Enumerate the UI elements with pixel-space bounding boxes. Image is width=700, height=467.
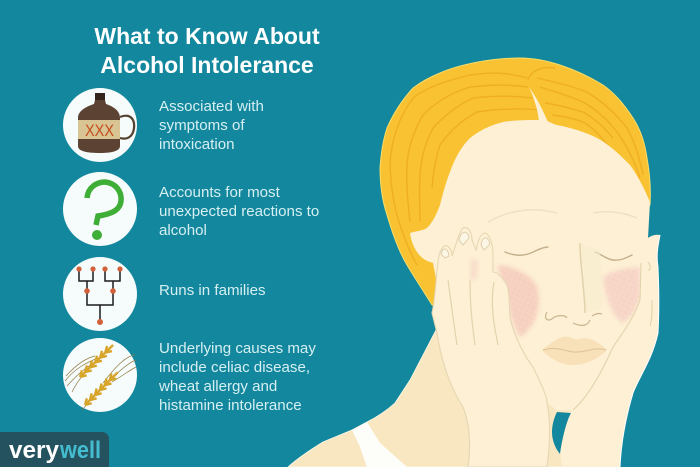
finger lines xyxy=(448,280,498,345)
pink finger blush xyxy=(470,257,478,280)
face xyxy=(410,120,650,410)
text: underlying causes: histamine intolerance xyxy=(159,397,302,414)
logo: verywell: very xyxy=(9,437,60,464)
fingernails xyxy=(441,232,490,258)
title: What to Know About xyxy=(94,23,320,49)
top strap xyxy=(352,422,407,467)
text: underlying causes: include celiac disease, xyxy=(159,359,310,376)
left hand xyxy=(432,228,550,467)
icon: jug xyxy=(63,88,137,162)
text: symptoms: Associated with xyxy=(159,98,264,115)
logo: verywell: well xyxy=(59,437,101,464)
text: underlying causes: wheat allergy and xyxy=(158,378,277,395)
right cheek rash xyxy=(603,267,640,323)
closed eyes xyxy=(505,247,632,260)
hair xyxy=(380,58,650,310)
text: symptoms: symptoms of xyxy=(159,117,245,134)
icon: wheat xyxy=(63,338,137,412)
hair parting xyxy=(529,87,548,122)
lips xyxy=(542,337,607,365)
teal gap between hand and neck xyxy=(552,412,571,454)
text: unexpected reactions: alcohol xyxy=(159,222,207,239)
text: unexpected reactions: Accounts for most xyxy=(159,184,281,201)
title: Alcohol Intolerance xyxy=(100,52,314,78)
illustration: woman holding her flushed face xyxy=(288,58,660,467)
brows xyxy=(488,210,637,222)
text: symptoms: intoxication xyxy=(159,136,235,153)
left cheek rash xyxy=(497,265,539,337)
text: unexpected reactions: unexpected reactions to xyxy=(159,203,319,220)
text: underlying causes: Underlying causes may xyxy=(159,340,316,357)
logo: verywell xyxy=(0,432,109,467)
text: runs in families: Runs in families xyxy=(159,282,266,299)
right hand xyxy=(560,235,660,467)
nose xyxy=(546,243,603,325)
neck and shoulder xyxy=(288,330,575,467)
icon: family tree xyxy=(63,257,137,331)
icon: jug: XXX xyxy=(85,121,114,140)
icon: question mark xyxy=(63,172,137,246)
